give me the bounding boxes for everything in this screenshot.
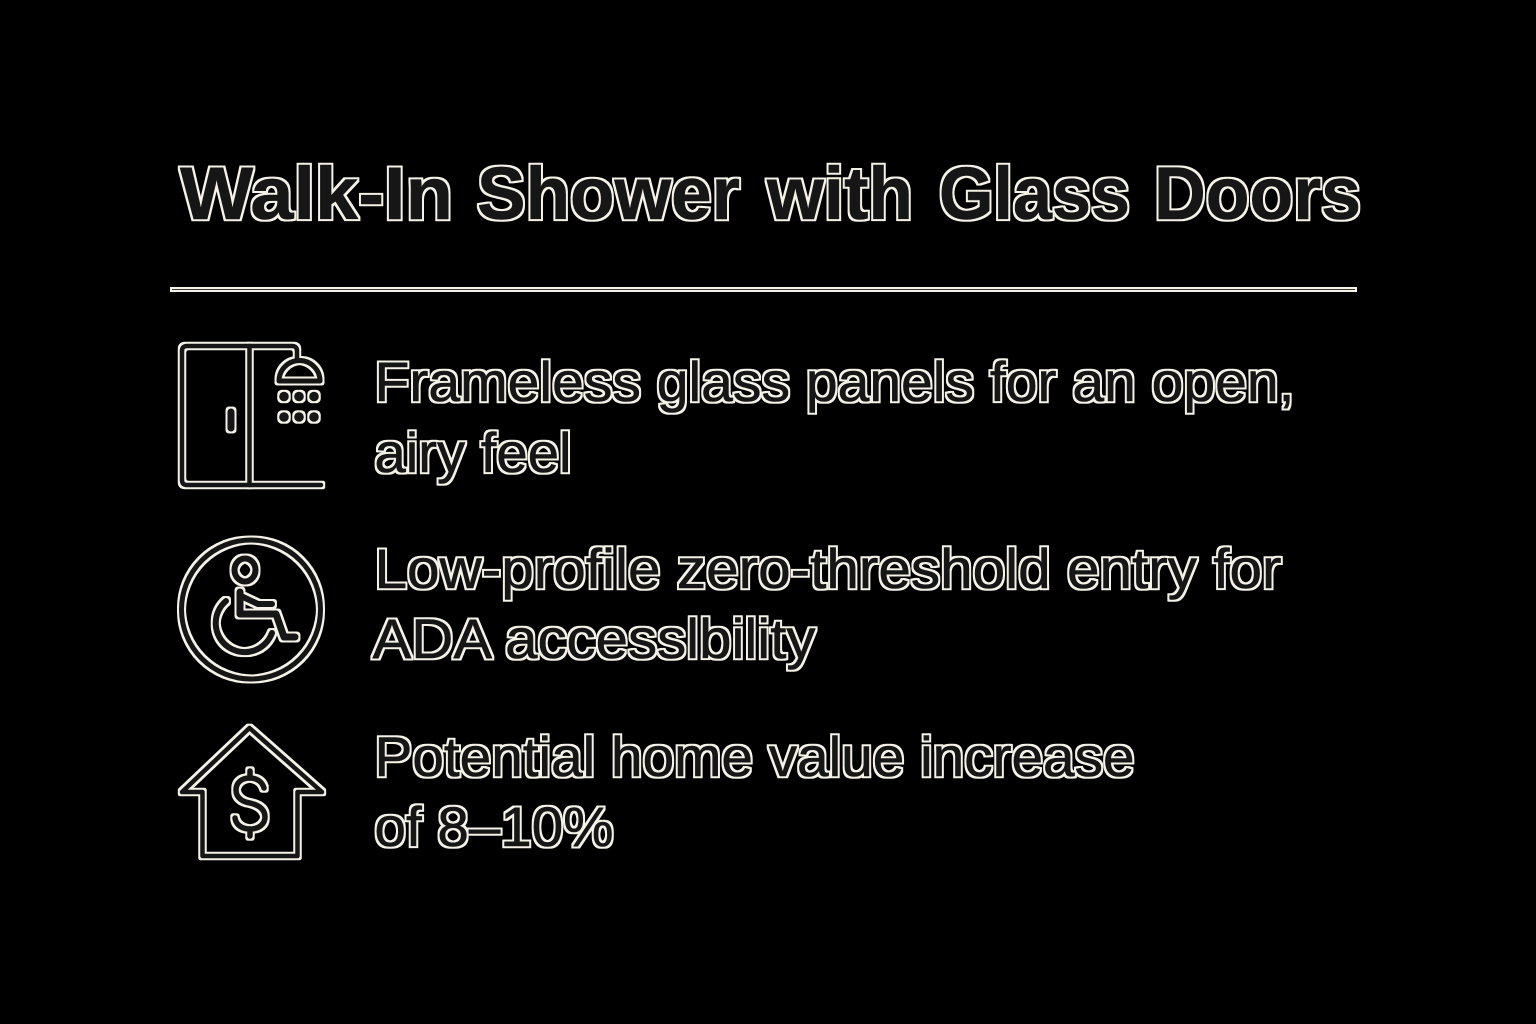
text: home value increase: of 8–10%: [374, 795, 614, 858]
title: [180, 152, 1361, 235]
icon: house with dollar sign: [182, 728, 322, 856]
title: Glass: [939, 152, 1130, 235]
text: frameless glass panels: [374, 350, 1294, 484]
title: Walk-In: [180, 152, 453, 235]
row 2: accessibility: [182, 537, 1282, 679]
title: Doors: [1154, 152, 1361, 235]
title: Shower: [477, 152, 740, 235]
text: frameless glass panels: airy feel: [374, 421, 572, 484]
text: zero-threshold entry: [372, 537, 1282, 670]
title: with: [766, 152, 913, 235]
text: zero-threshold entry: Low-profile zero-threshold entry for: [374, 537, 1282, 600]
icon: wheelchair in circle: [182, 540, 320, 679]
row 3: home value: [182, 725, 1134, 858]
divider line: [172, 289, 1355, 290]
row 1: frameless glass panels: [182, 346, 1294, 485]
text: zero-threshold entry: ADA accesslbility: [372, 607, 816, 670]
text: frameless glass panels: Frameless glass panels for an open,: [374, 350, 1294, 413]
text: home value increase: Potential home value increase: [374, 725, 1134, 788]
text: home value increase: [374, 725, 1134, 858]
icon: shower door with shower head: [182, 346, 321, 485]
